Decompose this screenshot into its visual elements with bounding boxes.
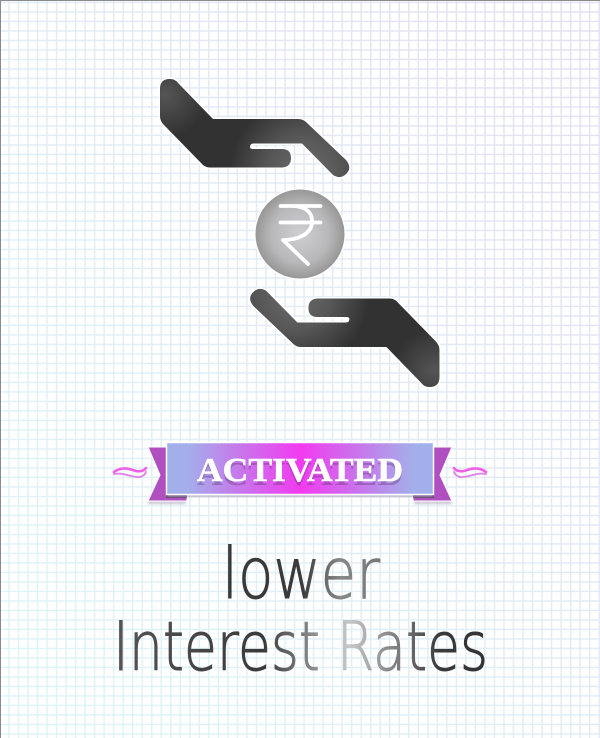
ribbon right tail (413, 447, 452, 504)
ribbon front panel (166, 442, 434, 497)
heading: Interest Rates: Interest Rates (113, 608, 488, 687)
ribbon label shadow: ACTIVATED (197, 456, 403, 493)
ribbon left tail (148, 447, 187, 504)
flourish: left (114, 468, 146, 477)
banner: activated ribbon (148, 442, 452, 504)
icon: rupee coin (254, 188, 346, 280)
icon: upper hand (160, 79, 349, 177)
ribbon label: ACTIVATED (197, 452, 403, 489)
heading: lower: lower (222, 533, 380, 615)
flourish: right (454, 468, 486, 477)
icon: lower hand (250, 289, 439, 387)
